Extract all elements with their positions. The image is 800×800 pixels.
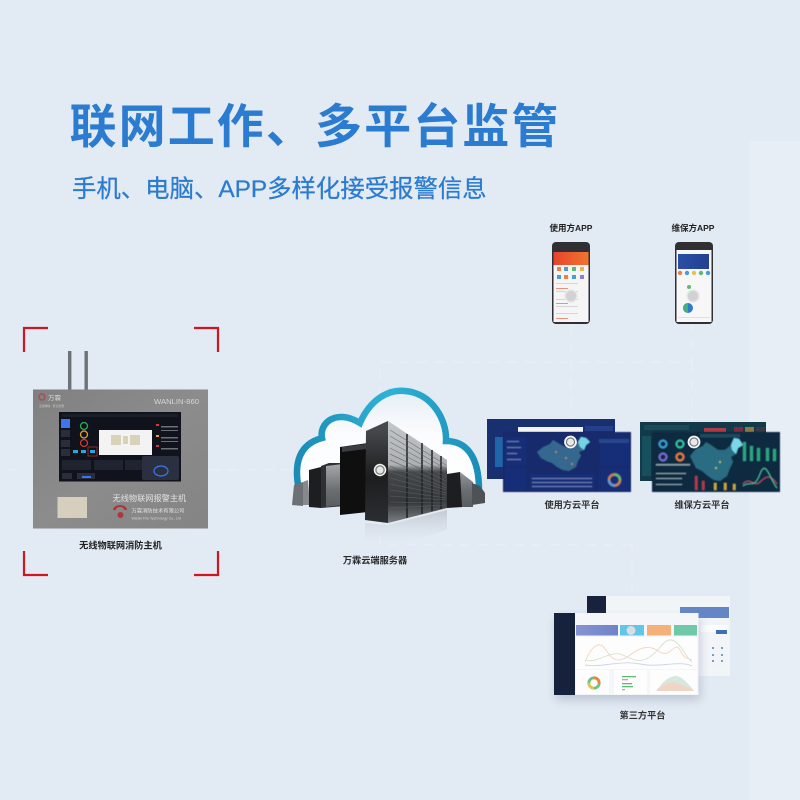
panel: wireless host: [24, 328, 218, 575]
phone: maintenance app: [672, 223, 715, 324]
device logo: 无线物联 · 安全监测: [39, 404, 64, 408]
phone: user app: [550, 223, 593, 324]
device company name: Wanlin Fire Technology Co., Ltd: [132, 516, 181, 520]
phone label: 维保方APP: [672, 223, 715, 233]
phone body: [675, 242, 713, 324]
dashboard shadow: [556, 618, 700, 700]
back screen: [587, 596, 730, 676]
platform label: 第三方平台: [620, 710, 665, 720]
panel: user cloud platform: [487, 419, 631, 510]
device model: WANLIN-860: [154, 397, 199, 406]
node marker: [565, 436, 576, 448]
corner brackets: [24, 328, 218, 575]
front screen: [503, 432, 631, 492]
device body: [33, 390, 208, 528]
device company name: [132, 506, 184, 520]
device name label: 无线物联网消防主机: [79, 540, 163, 550]
device label plate: [58, 497, 87, 518]
device logo: 万霖: [48, 394, 62, 402]
cloud fill: [297, 391, 479, 490]
device company logo: [113, 505, 127, 518]
back screen: [640, 422, 766, 481]
subtitle: 手机、电脑、APP多样化接受报警信息: [72, 176, 487, 203]
connector lines: [6, 325, 692, 600]
device logo: [39, 394, 64, 408]
device caption: 无线物联网报警主机: [112, 493, 187, 503]
device company name: 万霖消防技术有限公司: [132, 506, 184, 514]
icon: cloud outline: [297, 391, 479, 490]
front screen: [652, 432, 780, 492]
panel: cloud servers: [292, 391, 485, 566]
title: 联网工作、多平台监管: [70, 100, 560, 153]
node marker: [688, 436, 700, 448]
front screen: [554, 613, 698, 695]
platform label: 维保方云平台: [674, 499, 730, 510]
icon: antennas: [68, 351, 88, 390]
server label: 万霖云端服务器: [343, 554, 408, 566]
phone body: [552, 242, 590, 324]
right lighter panel: [749, 141, 800, 800]
panel: third-party platform: [554, 596, 730, 720]
back screen: [487, 419, 615, 479]
node marker: [374, 464, 386, 476]
panel: maintenance cloud platform: [640, 422, 780, 510]
device screen: [59, 412, 181, 482]
phone label: 使用方APP: [550, 223, 593, 233]
server reflection: [365, 510, 447, 548]
platform label: 使用方云平台: [544, 499, 600, 510]
server racks: [292, 421, 485, 523]
